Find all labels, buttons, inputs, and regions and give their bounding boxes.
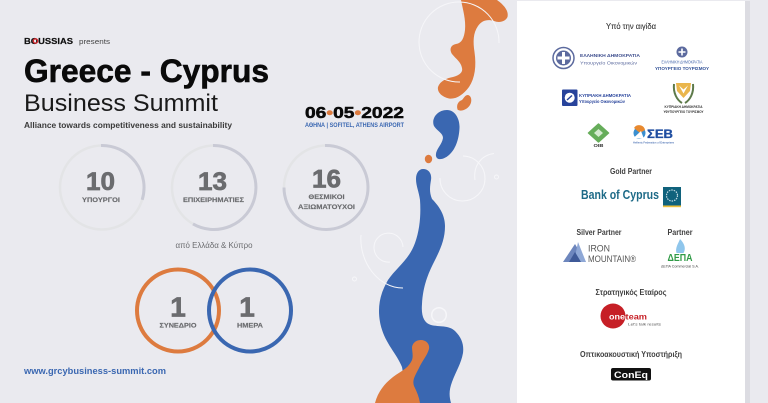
stat ring: 13 business leaders <box>172 145 256 230</box>
orange circle: 1 conference <box>137 270 219 352</box>
date and venue <box>305 105 404 129</box>
logo: oneteam: team <box>626 312 647 322</box>
logo: Hellenic Ministry of Tourism: ΕΛΛΗΝΙΚΗ ΔΗΜΟΚΡΑΤΙΑ <box>662 60 703 64</box>
logo: Cyprus Ministry of Finance: Υπουργείο Οικονομικών <box>579 99 626 104</box>
heading: strategic partner: Στρατηγικός Εταίρος <box>596 288 666 297</box>
logo: oneteam: one <box>609 312 625 322</box>
orange dot <box>425 155 432 163</box>
stat ring: 13 business leaders: ΕΠΙΧΕΙΡΗΜΑΤΙΕΣ <box>183 197 244 204</box>
subtitle: Business Summit: Business Summit <box>24 90 218 117</box>
stat ring: 13 business leaders: 13 <box>198 168 227 196</box>
logo: DEPA: ΔΕΠΑ <box>668 253 692 264</box>
decorative blobs <box>375 0 508 403</box>
blue teardrop <box>433 110 460 159</box>
logo: SEV: ΣΕΒ <box>647 129 673 141</box>
orange circle: 1 conference: ΣΥΝΕΔΡΙΟ <box>160 322 196 330</box>
logo: ConEq: ConEq <box>614 370 648 380</box>
logo: Bank of Cyprus: Bank of Cyprus <box>581 187 659 202</box>
logo: oneteam: Let's talk results <box>628 322 661 326</box>
logo: DEPA: ΔΕΠΑ Commercial S.A. <box>661 264 699 268</box>
blue circle: 1 day: 1 <box>239 292 255 322</box>
website link: www.grcybusiness-summit.com <box>23 366 166 377</box>
logo: Cyprus Deputy Ministry of Tourism <box>664 83 704 114</box>
logo: OIB <box>588 124 608 148</box>
stat ring: 16 officials: ΘΕΣΜΙΚΟΙ <box>308 194 345 201</box>
orange top blob <box>438 0 508 99</box>
heading: under the auspices: Υπό την αιγίδα <box>606 22 656 31</box>
panel: sponsors <box>517 1 750 403</box>
logo: Hellenic Ministry of Finance <box>553 48 641 68</box>
blue circle: 1 day: ΗΜΕΡΑ <box>237 322 263 330</box>
logo: SEV <box>633 125 675 144</box>
caption: από Ελλάδα & Κύπρο <box>176 241 253 250</box>
logo: SEV: Hellenic Federation of Enterprises <box>633 140 675 144</box>
white decorative circles <box>352 2 499 322</box>
logo: oneteam <box>600 304 661 328</box>
orange small drop <box>457 95 471 111</box>
logo: Cyprus Ministry of Finance <box>562 90 632 106</box>
logo: Cyprus Deputy Ministry of Tourism: ΚΥΠΡΙΑΚΗ ΔΗΜΟΚΡΑΤΙΑ <box>664 105 703 109</box>
stat ring: 16 officials: 16 <box>312 166 341 194</box>
logo: Iron Mountain: IRON <box>588 244 610 254</box>
blue main blob <box>379 169 463 403</box>
stat ring: 16 officials <box>284 145 368 230</box>
date and venue: 06 •05 •2022 <box>305 105 404 122</box>
date and venue: ΑΘΗΝΑ | SOFITEL, ATHENS AIRPORT <box>305 122 404 129</box>
logo: Cyprus Ministry of Finance: ΚΥΠΡΙΑΚΗ ΔΗΜΟΚΡΑΤΙΑ <box>579 93 632 98</box>
heading: partner: Partner <box>668 228 692 237</box>
heading: silver partner: Silver Partner <box>576 228 622 237</box>
orange bottom blob <box>375 340 429 403</box>
logo: Hellenic Ministry of Tourism <box>655 46 709 71</box>
logo: Hellenic Ministry of Finance: Υπουργείο Οικονομικών <box>580 60 638 66</box>
venn circles <box>137 270 291 352</box>
heading: gold partner: Gold Partner <box>610 167 652 176</box>
logo: Cyprus Deputy Ministry of Tourism: ΥΦΥΠΟΥΡΓΕΙΟ ΤΟΥΡΙΣΜΟΥ <box>664 110 704 114</box>
heading: audiovisual support: Οπτικοακουστική Υποστήριξη <box>580 350 682 359</box>
logo: Iron Mountain <box>563 242 636 265</box>
header: Boussias presents <box>24 36 111 46</box>
orange circle: 1 conference: 1 <box>170 292 186 322</box>
logo: OIB: ΟΙΒ <box>594 143 604 148</box>
stat ring: 10 ministers: ΥΠΟΥΡΓΟΙ <box>82 197 120 204</box>
stat ring: 16 officials: ΑΞΙΩΜΑΤΟΥΧΟΙ <box>298 204 355 211</box>
logo: Hellenic Ministry of Tourism: ΥΠΟΥΡΓΕΙΟ ΤΟΥΡΙΣΜΟΥ <box>655 66 709 71</box>
logo: DEPA <box>661 239 699 268</box>
header: Boussias presents: presents <box>79 39 111 46</box>
stat ring: 10 ministers <box>60 145 144 230</box>
blue circle: 1 day <box>209 270 291 352</box>
stat ring: 10 ministers: 10 <box>86 168 115 196</box>
header: Boussias presents: BOUSSIAS <box>24 36 73 46</box>
tagline: Alliance towards competitiveness and sustainability <box>24 120 232 130</box>
logo: Hellenic Ministry of Finance: ΕΛΛΗΝΙΚΗ ΔΗΜΟΚΡΑΤΙΑ <box>580 53 641 59</box>
logo: Iron Mountain: MOUNTAIN® <box>588 254 636 265</box>
title: Greece - Cyprus <box>24 53 269 89</box>
logo: ConEq <box>611 368 651 380</box>
